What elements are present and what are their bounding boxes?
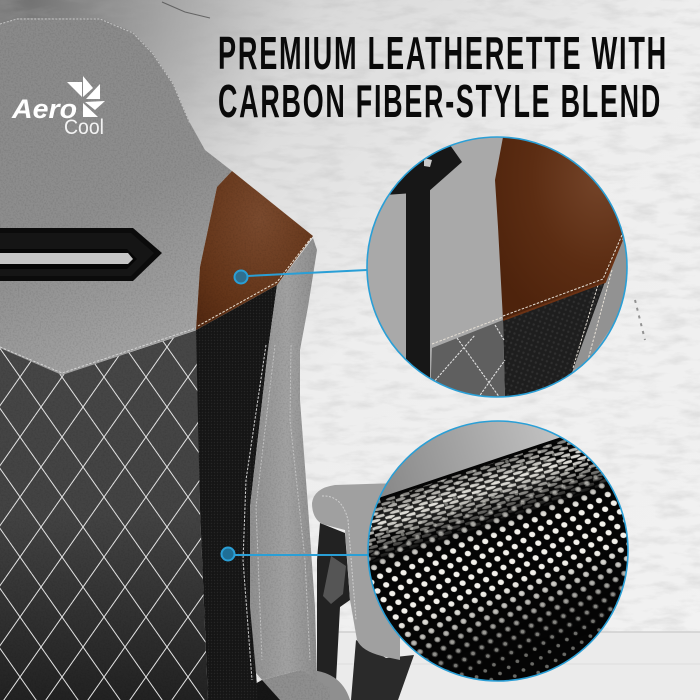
grey bolster bbox=[573, 237, 630, 370]
stitching bbox=[432, 235, 622, 368]
black vertical bar bbox=[406, 190, 430, 378]
black carbon side strip bbox=[196, 285, 277, 700]
seat cushion bbox=[226, 670, 350, 700]
headrest slot bbox=[0, 228, 162, 281]
icon: pinwheel bbox=[67, 76, 105, 117]
stitching on headrest edge bbox=[0, 19, 190, 124]
logo: AeroCool: Aero bbox=[11, 94, 77, 124]
brown leather bbox=[495, 138, 623, 319]
quilted grey panel bbox=[430, 320, 505, 400]
title bbox=[218, 27, 668, 127]
magnified circle: leatherette bbox=[367, 130, 640, 400]
chair backrest bbox=[0, 0, 330, 700]
connector: carbon fiber bbox=[222, 548, 368, 560]
quilted diamond panel bbox=[0, 330, 210, 700]
armrest and support bbox=[312, 483, 414, 700]
upper grey suede panel bbox=[0, 18, 232, 375]
slot opening bbox=[0, 253, 133, 264]
magnified circle: carbon fiber bbox=[365, 420, 628, 681]
grey upper edge bbox=[381, 422, 560, 497]
chevron stitching bbox=[0, 328, 196, 373]
logo: AeroCool bbox=[11, 76, 105, 139]
slot corner bbox=[385, 145, 462, 195]
side strip stitching bbox=[243, 345, 266, 680]
suede texture bbox=[0, 0, 330, 700]
bolster stitching bbox=[256, 345, 310, 660]
streak band bbox=[368, 440, 607, 562]
shoulder stitching bbox=[198, 238, 311, 326]
logo: AeroCool: Cool bbox=[64, 116, 104, 139]
carbon panel bbox=[503, 282, 605, 400]
grey side bolster bbox=[250, 238, 317, 680]
brown leatherette shoulder bbox=[196, 171, 313, 330]
connector: leatherette bbox=[234, 270, 367, 284]
large bright dots bbox=[368, 474, 628, 674]
sheen bbox=[375, 465, 560, 525]
floor bbox=[330, 632, 700, 700]
